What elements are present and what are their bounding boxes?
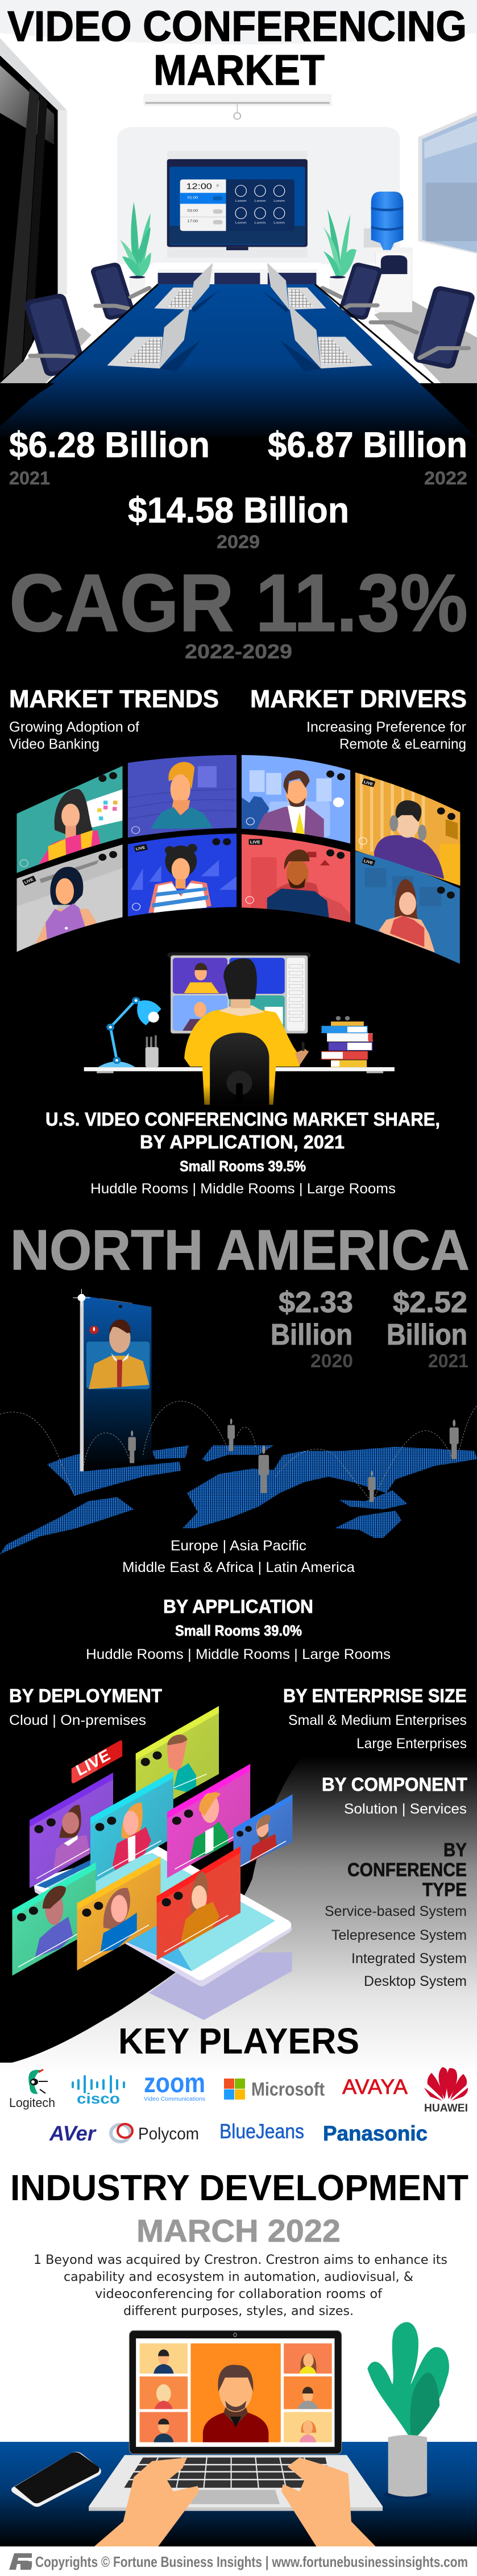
panel: blue caller [128,833,237,917]
pen holder [146,1035,159,1067]
by component: BY COMPONENT [322,1774,467,1795]
regions list: Europe | Asia Pacific [171,1538,306,1554]
market size 2029: 2029 [217,532,260,552]
window: amber [77,1856,160,1971]
U.S. share values [90,1158,396,1197]
development text: 1 Beyond was acquired by Crestron. Crestron aims to enhance its [34,2253,447,2267]
development text: different purposes, styles, and sizes. [123,2304,354,2318]
market drivers [250,685,467,752]
live badge [72,1740,122,1783]
water cooler [364,192,412,312]
market drivers: Remote & eLearning [339,736,466,752]
illustration: laptop on desk [11,2322,449,2546]
by conference type: TYPE [422,1879,467,1900]
logo: Huawei: HUAWEI [424,2102,468,2114]
industry development heading: INDUSTRY DEVELOPMENT [10,2167,468,2208]
development text [34,2253,447,2318]
by deployment [9,1685,162,1728]
regions list [122,1538,355,1575]
wall display: Lorem [235,221,247,225]
market size 2022: $6.87 Billion [268,425,467,465]
heading: U.S. market share: BY APPLICATION, 2021 [140,1131,345,1152]
by enterprise size: Small & Medium Enterprises [288,1712,467,1728]
hands [94,2458,376,2546]
panel: gray caller [16,844,123,952]
smartphone [73,1289,151,1471]
monitor [167,952,311,1034]
illustration: person at desk [84,952,395,1105]
panel: deep blue caller: LIVE [363,858,374,865]
desk band [0,2442,477,2546]
people on map [128,1418,459,1502]
market size 2029: $14.58 Billion [128,491,349,530]
wall display: Lorem [273,199,285,203]
North America 2021 [387,1286,468,1371]
market size 2021: 2021 [9,468,50,488]
by conference type: CONFERENCE [347,1859,467,1880]
development text: videoconferencing for collaboration rooms of [95,2287,383,2301]
window: blue [233,1794,293,1870]
by component [322,1774,467,1817]
heading: U.S. market share: U.S. VIDEO CONFERENCING MARKET SHARE, [45,1109,440,1130]
plant right [323,209,356,292]
by application [86,1596,391,1662]
logo: Panasonic: Panasonic [323,2122,428,2145]
window: cyan [90,1771,173,1884]
logo: Zoom: Video Communications [144,2096,205,2102]
logo: Microsoft [224,2079,325,2100]
plant left [120,202,151,293]
market size 2029 [128,491,349,552]
wall display: 01:00 [188,196,198,200]
panel: red caller [242,833,350,924]
potted plant [367,2322,449,2499]
projector screen housing [144,94,331,119]
North America 2021: $2.52 [393,1286,467,1319]
by conference type: Integrated System [351,1951,467,1967]
wall display: Lorem [273,221,285,225]
panel: amber caller [355,770,460,887]
market trends [9,685,219,752]
logo: Microsoft: Microsoft [251,2079,325,2100]
book stack [321,1016,372,1067]
by enterprise size: Large Enterprises [356,1736,467,1752]
heading: U.S. market share [45,1109,440,1152]
wall display: 12:00 [186,181,212,191]
market trends: MARKET TRENDS [9,685,219,713]
development text: capability and ecosystem in automation, audiovisual, & [64,2270,413,2284]
light section background [0,1751,477,2576]
window: green [12,1862,96,1976]
North America 2021: Billion [387,1318,467,1351]
laptops on table [107,263,372,372]
by deployment: Cloud | On-premises [9,1712,146,1728]
panel: violet caller [128,754,237,838]
U.S. share values: Huddle Rooms | Middle Rooms | Large Rooms [90,1181,396,1197]
by application: Huddle Rooms | Middle Rooms | Large Rooms [86,1646,391,1662]
window: lime [135,1706,219,1799]
wall display: 03:00 [188,209,198,213]
illustration: isometric phone and video windows [12,1706,293,2020]
panel: blue caller: LIVE [135,845,146,851]
U.S. share values: Small Rooms 39.5% [180,1158,306,1175]
North America 2021: 2021 [428,1350,468,1371]
video call wall [16,754,460,965]
North America heading: NORTH AMERICA [10,1218,470,1282]
logo: AVer: AVer [49,2122,97,2145]
illustration: meeting room [0,0,477,383]
panel: teal caller [16,765,123,874]
live badge: LIVE [72,1747,115,1779]
wall display: Lorem [235,199,247,203]
window: purple [30,1773,113,1888]
by conference type: Service-based System [325,1903,467,1919]
logo: Cisco [73,2076,124,2107]
wall display: Lorem [255,221,266,225]
North America 2020: $2.33 [279,1286,353,1319]
logo: Logitech [9,2069,55,2110]
North America 2020: Billion [271,1318,352,1351]
by conference type: BY [443,1839,467,1860]
logo: Logitech: Logitech [9,2096,55,2110]
chairs [23,262,476,378]
connection arcs [0,1401,477,1501]
by application: BY APPLICATION [163,1596,313,1617]
North America 2020 [271,1286,353,1371]
date: MARCH 2022 [136,2213,341,2249]
window: red [157,1846,240,1960]
market trends: Video Banking [9,736,99,752]
by conference type: Telepresence System [331,1927,467,1943]
logo: Huawei [424,2067,468,2114]
panel: teal caller: LIVE [25,799,36,808]
market size 2021 [9,425,210,488]
credenza [153,263,321,285]
logo: BlueJeans: BlueJeans [219,2119,304,2143]
panel: amber caller: LIVE [363,780,374,787]
market drivers: Increasing Preference for [306,719,466,735]
dotted world map [0,1445,477,1554]
regions list: Middle East & Africa | Latin America [122,1559,355,1575]
by component: Solution | Services [344,1801,467,1817]
by enterprise size: BY ENTERPRISE SIZE [283,1685,467,1706]
wall display: 17:00 [188,220,198,223]
logo: Zoom: zoom [144,2068,205,2098]
CAGR: 2022-2029 [185,641,292,663]
panel: light blue caller [242,754,350,847]
title [7,2,467,94]
by application: Small Rooms 39.0% [175,1622,302,1639]
panel: gray caller: LIVE [24,877,34,885]
by conference type: Desktop System [364,1973,467,1989]
seated person [184,959,309,1105]
logo: Avaya: AVAYA [342,2075,408,2098]
market drivers: MARKET DRIVERS [250,685,467,713]
desk [84,1067,395,1073]
wall display [167,159,308,250]
title: MARKET [154,46,325,94]
North America 2020: 2020 [310,1350,353,1371]
market trends: Growing Adoption of [9,719,139,735]
phone on desk [11,2452,101,2507]
market size 2022 [268,425,467,488]
logo: Cisco: cisco [77,2090,120,2107]
panel: red caller: LIVE [250,840,260,844]
conference table [0,284,477,438]
isometric phone [34,1845,292,2020]
by conference type [325,1839,467,1989]
panel: deep blue caller [355,851,460,965]
key players heading: KEY PLAYERS [118,2021,359,2061]
by deployment: BY DEPLOYMENT [9,1685,162,1706]
by enterprise size [283,1685,467,1752]
logo: Polycom [111,2124,199,2143]
wall display: Lorem [255,199,266,203]
black floor band [0,284,477,426]
footer [0,2546,477,2576]
window: magenta [167,1764,250,1878]
laptop base [89,2455,383,2511]
desk lamp [98,997,161,1067]
laptop screen [129,2330,342,2454]
market size 2022: 2022 [424,468,467,488]
logo: Polycom: Polycom [138,2125,199,2143]
illustration: world map with phone [0,1289,477,1554]
market size 2021: $6.28 Billion [9,425,210,465]
